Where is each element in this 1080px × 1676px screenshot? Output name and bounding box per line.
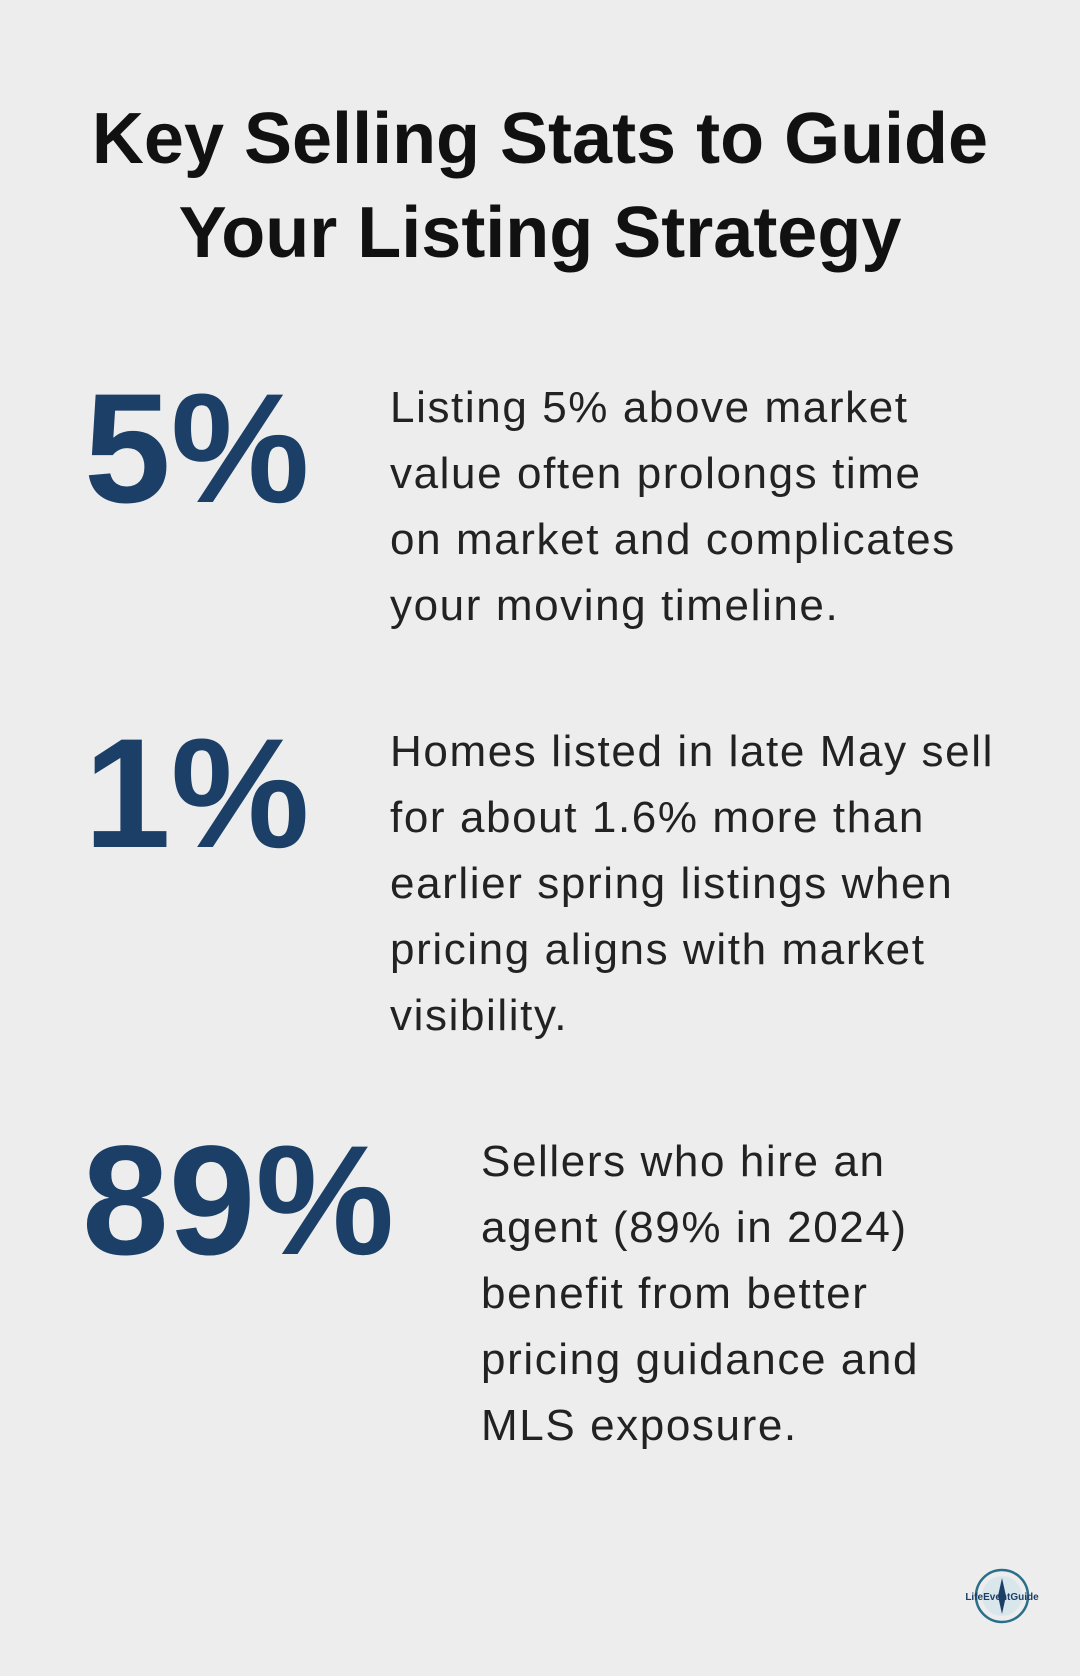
description 3 — [481, 1137, 919, 1450]
description 1 — [390, 383, 956, 630]
description 2: visibility. — [390, 991, 568, 1040]
title: Your Listing Strategy — [179, 193, 901, 273]
stat block 3 — [82, 1114, 919, 1450]
description 2: for about 1.6% more than — [390, 793, 925, 842]
description 3: pricing guidance and — [481, 1335, 919, 1384]
title — [92, 99, 988, 273]
description 3: Sellers who hire an — [481, 1137, 886, 1186]
description 1: your moving timeline. — [390, 581, 839, 630]
logo: LifeEventGuide — [965, 1568, 1039, 1624]
stat number: 89%: 89% — [82, 1114, 394, 1288]
stat number: 1%: 1% — [84, 707, 309, 881]
description 1: on market and complicates — [390, 515, 956, 564]
description 1: Listing 5% above market — [390, 383, 909, 432]
stat block 2 — [84, 707, 994, 1040]
stat number: 5%: 5% — [84, 362, 309, 536]
description 3: benefit from better — [481, 1269, 868, 1318]
description 3: agent (89% in 2024) — [481, 1203, 908, 1252]
title: Key Selling Stats to Guide — [92, 99, 988, 179]
description 3: MLS exposure. — [481, 1401, 798, 1450]
logo: LifeEventGuide: LifeEventGuide — [965, 1592, 1039, 1603]
description 2: earlier spring listings when — [390, 859, 953, 908]
description 2: pricing aligns with market — [390, 925, 926, 974]
description 2: Homes listed in late May sell — [390, 727, 994, 776]
description 1: value often prolongs time — [390, 449, 922, 498]
stat block 1 — [84, 362, 956, 630]
description 2 — [390, 727, 994, 1040]
